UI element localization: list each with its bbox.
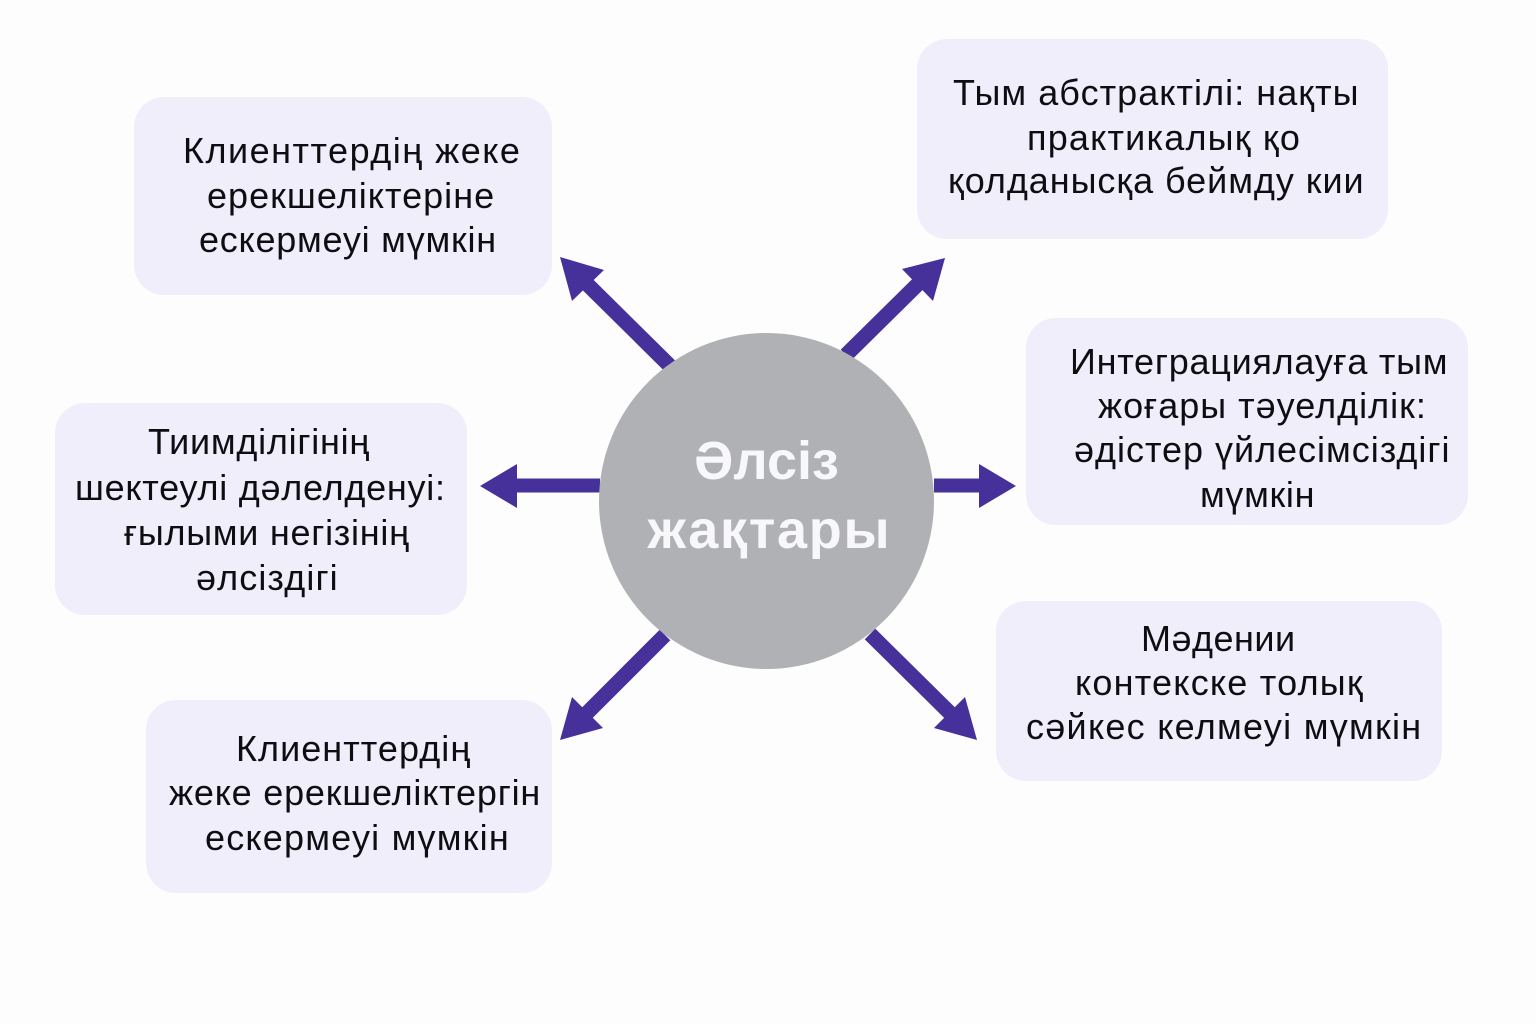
text line: қолданысқа беймду кии xyxy=(948,160,1365,201)
arrow: lower left xyxy=(560,635,665,740)
text line: Интеграциялауға тым xyxy=(1070,341,1448,382)
text line: ерекшеліктеріне xyxy=(207,175,495,216)
arrow: lower right xyxy=(870,634,977,740)
panel: lower left xyxy=(146,700,552,893)
text line: жоғары тәуелділік: xyxy=(1098,385,1427,426)
arrow: left xyxy=(480,464,600,508)
text line: контекске толық xyxy=(1075,662,1364,703)
text line: Клиенттердің xyxy=(236,728,471,769)
circle title: жақтары xyxy=(648,500,891,560)
text line: ғылыми негізінің xyxy=(124,512,410,553)
text line: ескермеуі мүмкін xyxy=(205,817,510,858)
central circle xyxy=(599,333,934,669)
panel: right xyxy=(1026,318,1468,525)
text line: практикалық қо xyxy=(1027,117,1301,158)
circle title: Әлсіз xyxy=(694,431,839,491)
text line: Тым абстрактілі: нақты xyxy=(953,72,1360,113)
panel: top left xyxy=(134,97,552,295)
arrow: upper right xyxy=(846,258,945,355)
text line: Тиимділігінің xyxy=(148,421,370,462)
circle title xyxy=(647,431,891,560)
text line: сәйкес келмеуі мүмкін xyxy=(1026,706,1422,747)
text line: әлсіздігі xyxy=(196,557,339,598)
text line: Мәдении xyxy=(1141,618,1296,659)
text line: шектеулі дәлелденуі: xyxy=(75,467,446,508)
text line: ескермеуі мүмкін xyxy=(199,219,497,260)
text line: әдістер үйлесімсіздігі xyxy=(1074,429,1450,470)
text line: Клиенттердің жеке xyxy=(183,130,521,171)
text line: жеке ерекшеліктергін xyxy=(169,772,541,813)
panel: lower right xyxy=(996,601,1442,781)
arrow: right xyxy=(934,464,1016,508)
panel: left xyxy=(55,403,467,615)
arrow: upper left xyxy=(560,257,670,366)
panel: top right xyxy=(917,39,1388,239)
text line: мүмкін xyxy=(1200,474,1315,515)
